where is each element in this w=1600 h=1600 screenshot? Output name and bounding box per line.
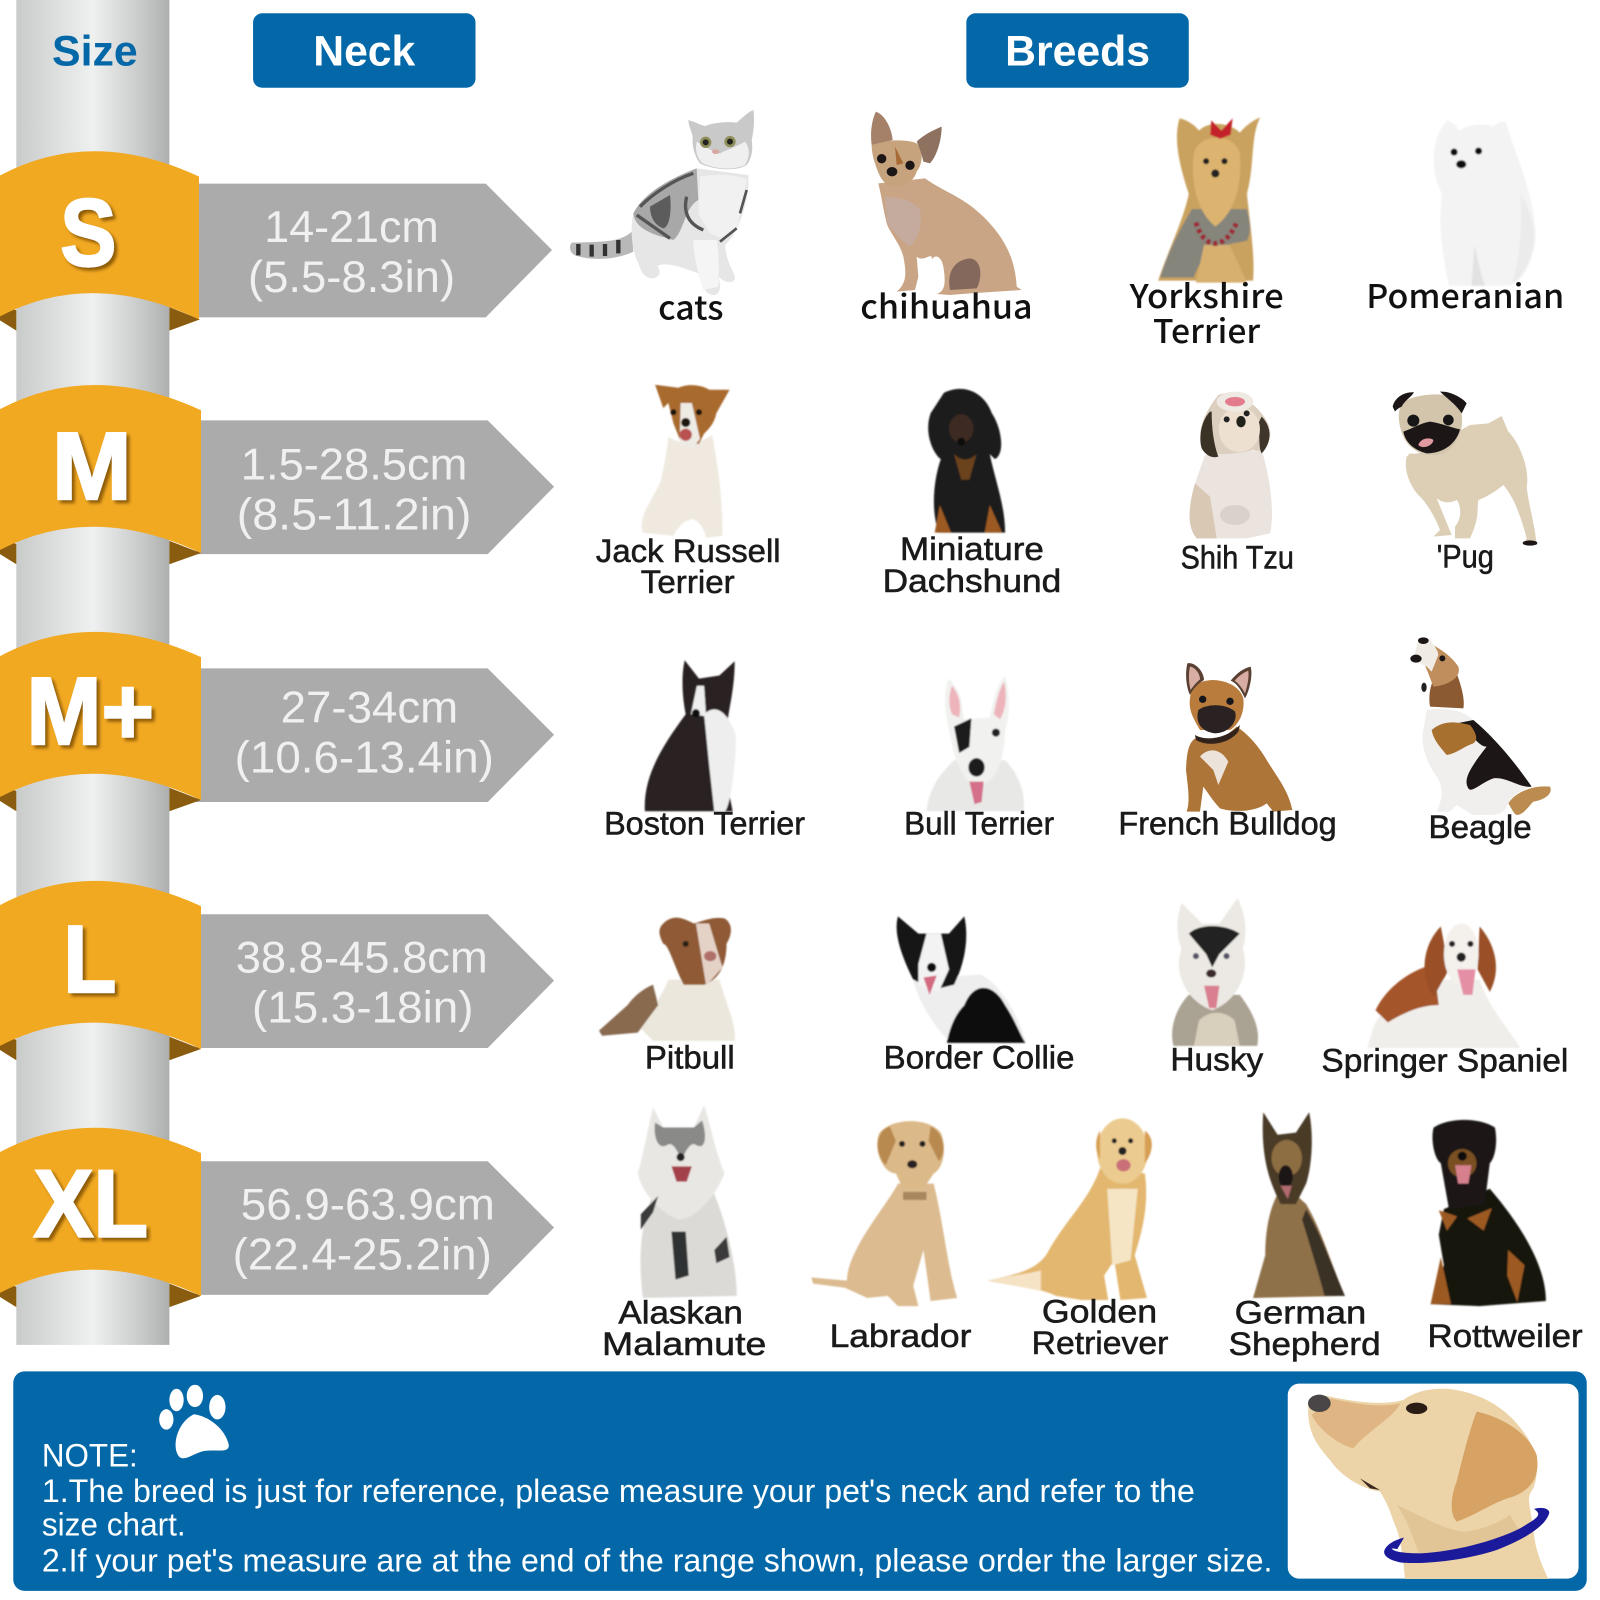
label: Dachshund: [883, 562, 1061, 599]
neck range arrow S: (5.5-8.3in): [248, 251, 455, 302]
breed: German Shepherd: [1229, 1112, 1381, 1362]
neck range arrow M+: [196, 668, 554, 802]
size row: M: [0, 385, 554, 564]
ribbon XL: [0, 1128, 201, 1307]
icon: beagle: [1410, 637, 1551, 815]
breed: Rottweiler: [1428, 1120, 1583, 1354]
label: Bull Terrier: [904, 805, 1054, 842]
size column: [16, 0, 169, 1345]
label: Labrador: [830, 1317, 972, 1354]
ribbon L: L: [63, 906, 116, 1013]
neck range arrow S: [194, 184, 552, 317]
breed: cats: [570, 110, 754, 329]
icon: german shepherd: [1253, 1112, 1345, 1298]
note text: [42, 1436, 1272, 1578]
label: Golden: [1042, 1292, 1157, 1329]
breed: Alaskan Malamute: [602, 1105, 766, 1362]
label: Retriever: [1032, 1324, 1168, 1361]
label: Jack Russell: [596, 532, 781, 569]
breed: Miniature Dachshund: [883, 389, 1061, 599]
label: [596, 532, 781, 600]
neck range arrow L: 38.8-45.8cm: [236, 931, 488, 982]
breed: French Bulldog: [1118, 663, 1337, 842]
breed: Pitbull: [599, 918, 735, 1075]
neck range arrow XL: 56.9-63.9cm: [241, 1178, 495, 1229]
ribbon M: M: [52, 413, 132, 520]
breed: Pug: [1393, 392, 1537, 574]
breed: Beagle: [1410, 637, 1551, 845]
heading: Breeds: [966, 13, 1189, 88]
ribbon S: S: [60, 179, 116, 286]
breed: Shih Tzu: [1181, 392, 1294, 575]
breed: Pomeranian: [1366, 120, 1564, 318]
label: chihuahua: [860, 281, 1033, 328]
icon: border collie: [897, 916, 1026, 1043]
ribbon M+: M+: [27, 658, 154, 765]
neck range arrow XL: (22.4-25.2in): [233, 1228, 492, 1279]
breed: Bull Terrier: [904, 676, 1054, 842]
label: cats: [658, 282, 723, 329]
label: French Bulldog: [1118, 805, 1337, 842]
icon: pitbull: [599, 918, 735, 1041]
icon: boston terrier: [645, 660, 736, 811]
ribbon S: [0, 151, 200, 331]
label: Yorkshire: [1129, 271, 1284, 318]
label: Terrier: [1153, 306, 1261, 353]
label: Terrier: [641, 563, 735, 600]
ribbon M: [0, 385, 201, 564]
label: [1129, 271, 1284, 353]
size row: L: [0, 881, 554, 1060]
icon: cat: [570, 110, 754, 295]
label: [1229, 1293, 1381, 1362]
icon: rottweiler: [1431, 1120, 1546, 1306]
icon: yorkshire terrier: [1158, 117, 1260, 283]
label: Pitbull: [645, 1038, 735, 1075]
label: German: [1235, 1293, 1366, 1330]
icon: pomeranian: [1434, 120, 1536, 286]
icon: chihuahua: [871, 112, 1022, 295]
heading: Size: Size: [52, 27, 138, 75]
size row: M+: [0, 632, 554, 811]
label: [883, 530, 1061, 599]
ribbon M+: [0, 632, 201, 811]
neck range arrow L: (15.3-18in): [252, 981, 473, 1032]
label: Boston Terrier: [604, 805, 805, 842]
neck range arrow M+: 27-34cm: [281, 681, 458, 732]
label: Pomeranian: [1366, 271, 1564, 318]
breed: Labrador: [811, 1121, 972, 1354]
breed: Husky: [1170, 898, 1264, 1077]
icon: shih tzu: [1190, 392, 1272, 538]
breed: Springer Spaniel: [1321, 923, 1568, 1078]
label: Alaskan: [618, 1293, 743, 1330]
breed: Boston Terrier: [604, 660, 805, 842]
breed: Border Collie: [884, 916, 1074, 1075]
heading: Neck: Neck: [313, 27, 415, 75]
label: Beagle: [1429, 808, 1532, 845]
note text: NOTE:: [42, 1436, 138, 1473]
label: Border Collie: [884, 1038, 1074, 1075]
icon: labrador: [811, 1121, 957, 1306]
note text: 1.The breed is just for reference, please measure your pet's neck and refer to the: [42, 1472, 1195, 1509]
icon: pug: [1393, 392, 1537, 546]
photo: dog neck measurement: [1288, 1384, 1579, 1579]
breed: Yorkshire Terrier: [1129, 117, 1284, 353]
label: 'Pug: [1437, 537, 1494, 574]
icon: husky: [1172, 898, 1258, 1046]
heading: Neck: [253, 13, 476, 88]
icon: bull terrier: [927, 676, 1024, 811]
neck range arrow M: (8.5-11.2in): [237, 489, 471, 540]
icon: french bulldog: [1186, 663, 1292, 812]
label: Rottweiler: [1428, 1317, 1583, 1354]
breed: Golden Retriever: [988, 1118, 1168, 1361]
label: Husky: [1170, 1040, 1264, 1077]
neck range arrow M: [196, 420, 554, 554]
ribbon XL: XL: [34, 1151, 148, 1258]
icon: paw: [159, 1385, 229, 1458]
heading: Breeds: Breeds: [1005, 27, 1150, 75]
breed: chihuahua: [860, 112, 1033, 328]
size row: XL: [0, 1128, 554, 1307]
icon: golden retriever: [988, 1118, 1152, 1300]
label: [602, 1293, 766, 1362]
note text: 2.If your pet's measure are at the end of the range shown, please order the larger size.: [42, 1541, 1272, 1578]
label: Shepherd: [1229, 1325, 1381, 1362]
size row: S: [0, 151, 552, 331]
note text: size chart.: [42, 1506, 186, 1543]
neck range arrow S: 14-21cm: [264, 201, 439, 252]
icon: alaskan malamute: [638, 1105, 737, 1298]
icon: dachshund: [928, 389, 1005, 533]
neck range arrow M+: (10.6-13.4in): [235, 731, 494, 782]
neck range arrow L: [196, 914, 554, 1048]
label: Shih Tzu: [1181, 538, 1294, 575]
breed: Jack Russell Terrier: [596, 385, 781, 600]
icon: jack russell: [642, 385, 730, 538]
label: Miniature: [900, 530, 1044, 567]
icon: springer spaniel: [1367, 923, 1520, 1048]
label: Springer Spaniel: [1321, 1041, 1568, 1078]
neck range arrow XL: [196, 1161, 554, 1295]
label: [1032, 1292, 1168, 1361]
label: Malamute: [602, 1325, 766, 1362]
ribbon L: [0, 881, 201, 1060]
note panel: [13, 1371, 1587, 1591]
neck range arrow M: 1.5-28.5cm: [241, 439, 467, 490]
